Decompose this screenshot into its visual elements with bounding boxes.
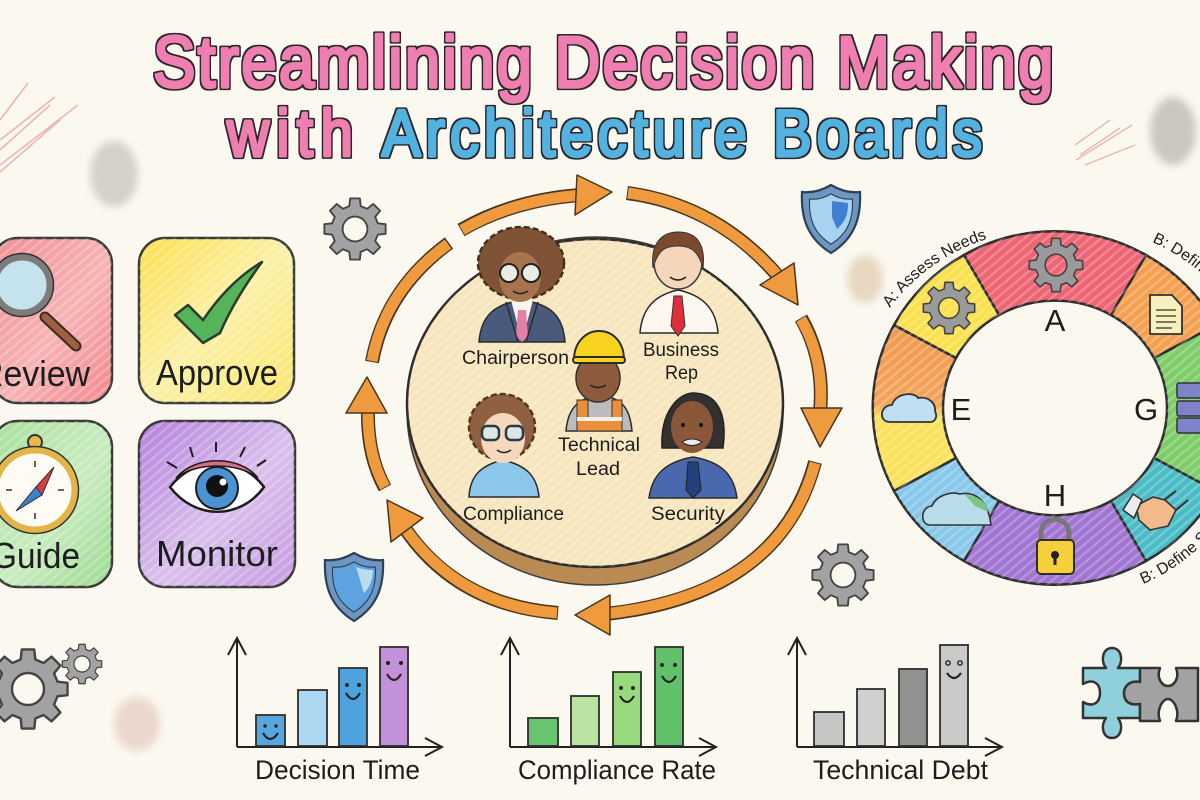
icon: cloud with trees — [923, 493, 991, 525]
hatch overlay — [873, 231, 1200, 585]
person: security: Security — [651, 504, 726, 525]
panel: approve card: Approve — [156, 352, 278, 393]
person: compliance: Compliance — [463, 504, 564, 525]
arrow: right side — [801, 318, 842, 447]
panel: approve card — [139, 238, 294, 403]
person: business rep: Rep — [665, 363, 698, 384]
person: chairperson: Chairperson — [462, 348, 569, 369]
architecture phase ring — [872, 230, 1200, 586]
person: technical lead: Lead — [576, 459, 620, 480]
ring letter E: E — [951, 392, 971, 427]
person: compliance — [463, 394, 564, 525]
icon: servers — [1177, 383, 1200, 433]
icon: small gear bottom left — [62, 644, 102, 684]
ring letter A: A — [1045, 303, 1066, 338]
panel: monitor card — [139, 421, 295, 587]
arrow: right to bottom — [575, 462, 815, 635]
icon: padlock — [1037, 520, 1074, 574]
panel: monitor card: Monitor — [156, 533, 278, 574]
title — [153, 23, 1053, 171]
panel: round table — [407, 237, 783, 585]
ring label: assess needs: A: Assess Needs — [884, 231, 986, 308]
cycle arrows — [346, 175, 842, 635]
icon: gear lower right of cycle — [812, 544, 874, 606]
icon: large gear bottom left — [0, 649, 68, 729]
segment: orange and yellow left — [873, 325, 956, 491]
icon: ring gear top — [1029, 238, 1083, 292]
panel: guide card — [0, 421, 112, 587]
person: chairperson — [462, 227, 569, 369]
chart: compliance rate: Compliance Rate — [518, 755, 716, 785]
title: Architecture Boards — [382, 98, 982, 171]
title: with — [226, 98, 353, 171]
chart: decision time — [228, 638, 442, 785]
segment: teal — [1111, 458, 1200, 561]
segment: green — [1154, 325, 1200, 491]
chart: technical debt: Technical Debt — [813, 755, 988, 785]
title: Streamlining Decision Making — [153, 23, 1053, 103]
arrow: left side — [346, 377, 387, 488]
icon: ring gear upper left — [923, 282, 975, 334]
ring letter G: G — [1134, 392, 1158, 427]
arrow: top to right — [627, 193, 798, 305]
icon: document — [1150, 295, 1182, 334]
ring letter H: H — [1044, 478, 1066, 513]
segment: red top — [964, 231, 1146, 315]
person: business rep: Business — [643, 340, 719, 361]
icon: gear upper left of cycle — [324, 198, 386, 260]
chart: decision time: Decision Time — [255, 755, 420, 785]
segment: light blue — [894, 458, 999, 561]
person: security — [649, 393, 737, 525]
person: technical lead: Technical — [558, 435, 640, 456]
icon: shield top — [802, 185, 860, 253]
icon: puzzle pieces — [1083, 648, 1198, 738]
icon: shield bottom — [325, 553, 383, 621]
arrow: top left to top — [461, 175, 612, 230]
panel: review card — [0, 238, 112, 403]
arrow: bottom to left — [387, 500, 558, 613]
segment: orange — [1111, 255, 1200, 358]
icon: cloud — [882, 394, 936, 422]
chart: technical debt — [788, 638, 1002, 785]
person: business rep — [640, 232, 719, 384]
segment: purple — [964, 501, 1146, 585]
person: technical lead — [558, 331, 640, 480]
arc: upper left segment — [372, 243, 449, 362]
icon: handshake — [1123, 491, 1188, 530]
segment: yellow — [894, 255, 999, 358]
chart: compliance rate — [501, 638, 716, 785]
